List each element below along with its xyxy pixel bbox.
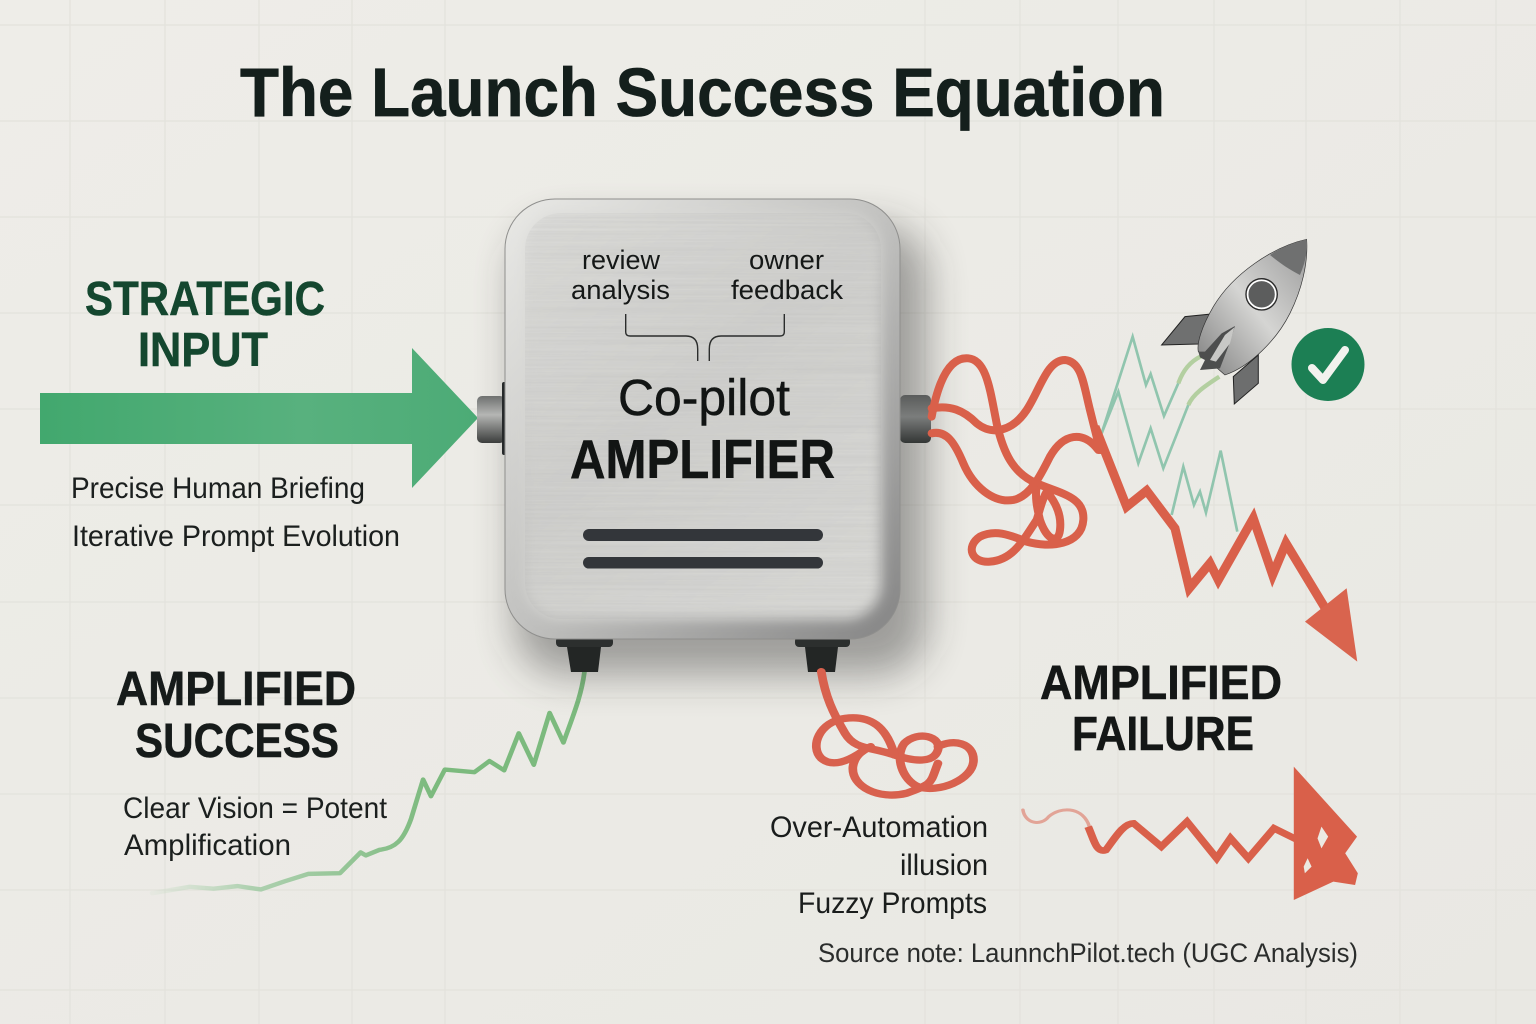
port: bottom left — [556, 637, 613, 672]
text: failure causes — [770, 811, 988, 920]
port: bottom right — [795, 637, 850, 672]
device: co-pilot amplifier — [477, 199, 931, 672]
heading: amplified failure — [1040, 657, 1282, 761]
heading: strategic input: STRATEGIC — [85, 273, 325, 326]
tangled red line and falling arrow — [932, 358, 1357, 662]
failure zigzag with broken arrow — [1023, 767, 1358, 900]
text: failure causes: Over-Automation — [770, 811, 988, 844]
device label: review analysis: review — [582, 245, 660, 275]
tangled red line: bottom port — [816, 672, 974, 795]
heading: amplified failure: FAILURE — [1072, 708, 1254, 761]
port: right output — [900, 395, 931, 443]
heading: amplified success: SUCCESS — [135, 715, 339, 768]
arrow: strategic input — [40, 348, 478, 488]
text: input details — [71, 472, 400, 553]
brushed metal texture — [525, 213, 881, 619]
device label: owner feedback: feedback — [731, 275, 843, 305]
device label: review analysis — [571, 245, 670, 305]
icon: rocket — [1162, 239, 1307, 405]
device title: amplifier: AMPLIFIER — [570, 428, 835, 490]
text: success details: Amplification — [124, 829, 291, 862]
text: input details: Precise Human Briefing — [71, 472, 365, 505]
icon: success check badge — [1292, 328, 1364, 401]
heading: amplified failure: AMPLIFIED — [1040, 657, 1282, 710]
thin green lines: potential success — [1102, 337, 1237, 532]
text: success details — [123, 792, 388, 862]
device label: owner feedback — [731, 245, 843, 305]
heading: amplified success — [116, 663, 356, 768]
vent slots — [583, 529, 823, 568]
title: The Launch Success Equation — [240, 54, 1165, 131]
port: left input — [477, 382, 506, 455]
text: input details: Iterative Prompt Evolution — [72, 520, 400, 553]
source note: Source note: LaunnchPilot.tech (UGC Analysis) — [818, 938, 1358, 968]
amplifier shadow — [515, 225, 927, 675]
chart line: amplified success — [152, 672, 584, 893]
text: success details: Clear Vision = Potent — [123, 792, 388, 825]
bracket connectors — [626, 314, 784, 361]
metal face — [525, 213, 881, 619]
device label: review analysis: analysis — [571, 275, 670, 305]
heading: strategic input: INPUT — [138, 324, 268, 377]
heading: strategic input — [85, 273, 325, 377]
device title: co-pilot: Co-pilot — [618, 369, 790, 426]
heading: amplified success: AMPLIFIED — [116, 663, 356, 716]
device label: owner feedback: owner — [749, 245, 824, 275]
metal shell — [505, 199, 900, 639]
text: failure causes: Fuzzy Prompts — [798, 887, 987, 920]
text: failure causes: illusion — [900, 849, 988, 882]
